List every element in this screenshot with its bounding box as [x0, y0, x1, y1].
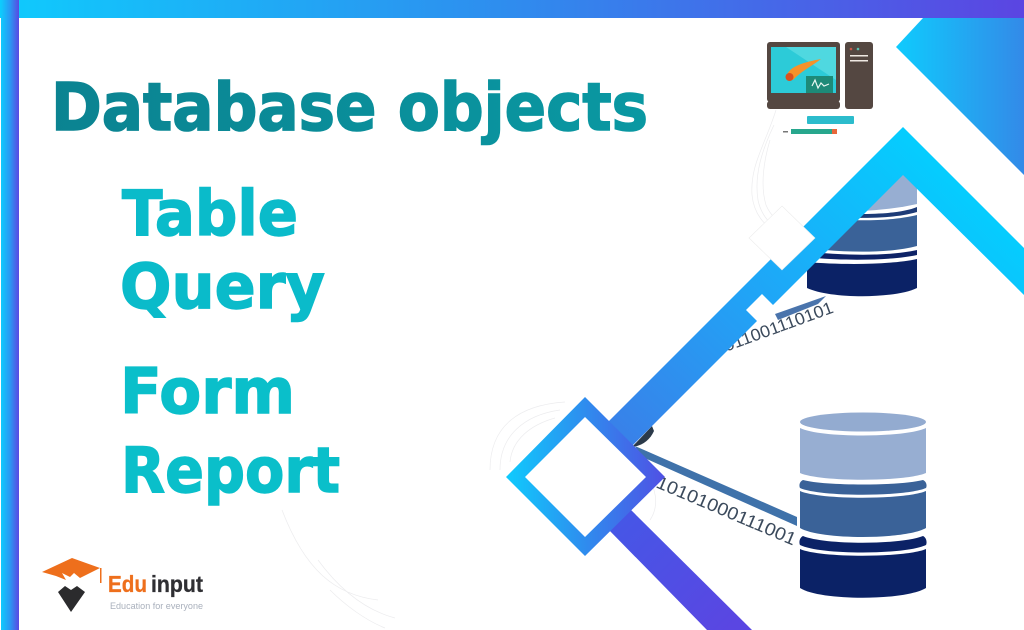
corner triangle [896, 18, 1024, 175]
binary text lower: 10101000111001 [653, 472, 799, 549]
lower arm [607, 507, 752, 630]
list item: Report: Report [121, 434, 340, 507]
connector white diamond large [749, 206, 815, 270]
top gradient bar [0, 0, 1024, 18]
logo tassel [100, 568, 102, 583]
icon: lower database cylinder [799, 412, 927, 598]
logo icon: pen nib [58, 586, 85, 612]
list item: Form: Form [120, 355, 295, 428]
data strip upper [775, 296, 826, 320]
logo text: Edu: Edu [108, 571, 147, 597]
dark connector stub [632, 426, 654, 447]
faint line swirls [282, 110, 790, 628]
chevron frame [604, 127, 1024, 450]
data strip lower [635, 446, 797, 526]
binary text upper: 0011001110101 [712, 298, 836, 359]
list item: Query: Query [120, 250, 325, 323]
logo tagline: Education for everyone [110, 601, 203, 612]
logo icon: graduation cap [42, 558, 100, 580]
connector white diamond small [746, 294, 778, 326]
icon: desktop computer [767, 42, 873, 134]
left gradient bar [1, 0, 19, 630]
title: Database objects [51, 69, 648, 146]
logo text: input: input [151, 571, 203, 597]
diamond frame [506, 397, 665, 556]
icon: upper database cylinder [807, 170, 917, 296]
logo: Edu input [42, 558, 203, 612]
list item: Table: Table [122, 177, 298, 250]
